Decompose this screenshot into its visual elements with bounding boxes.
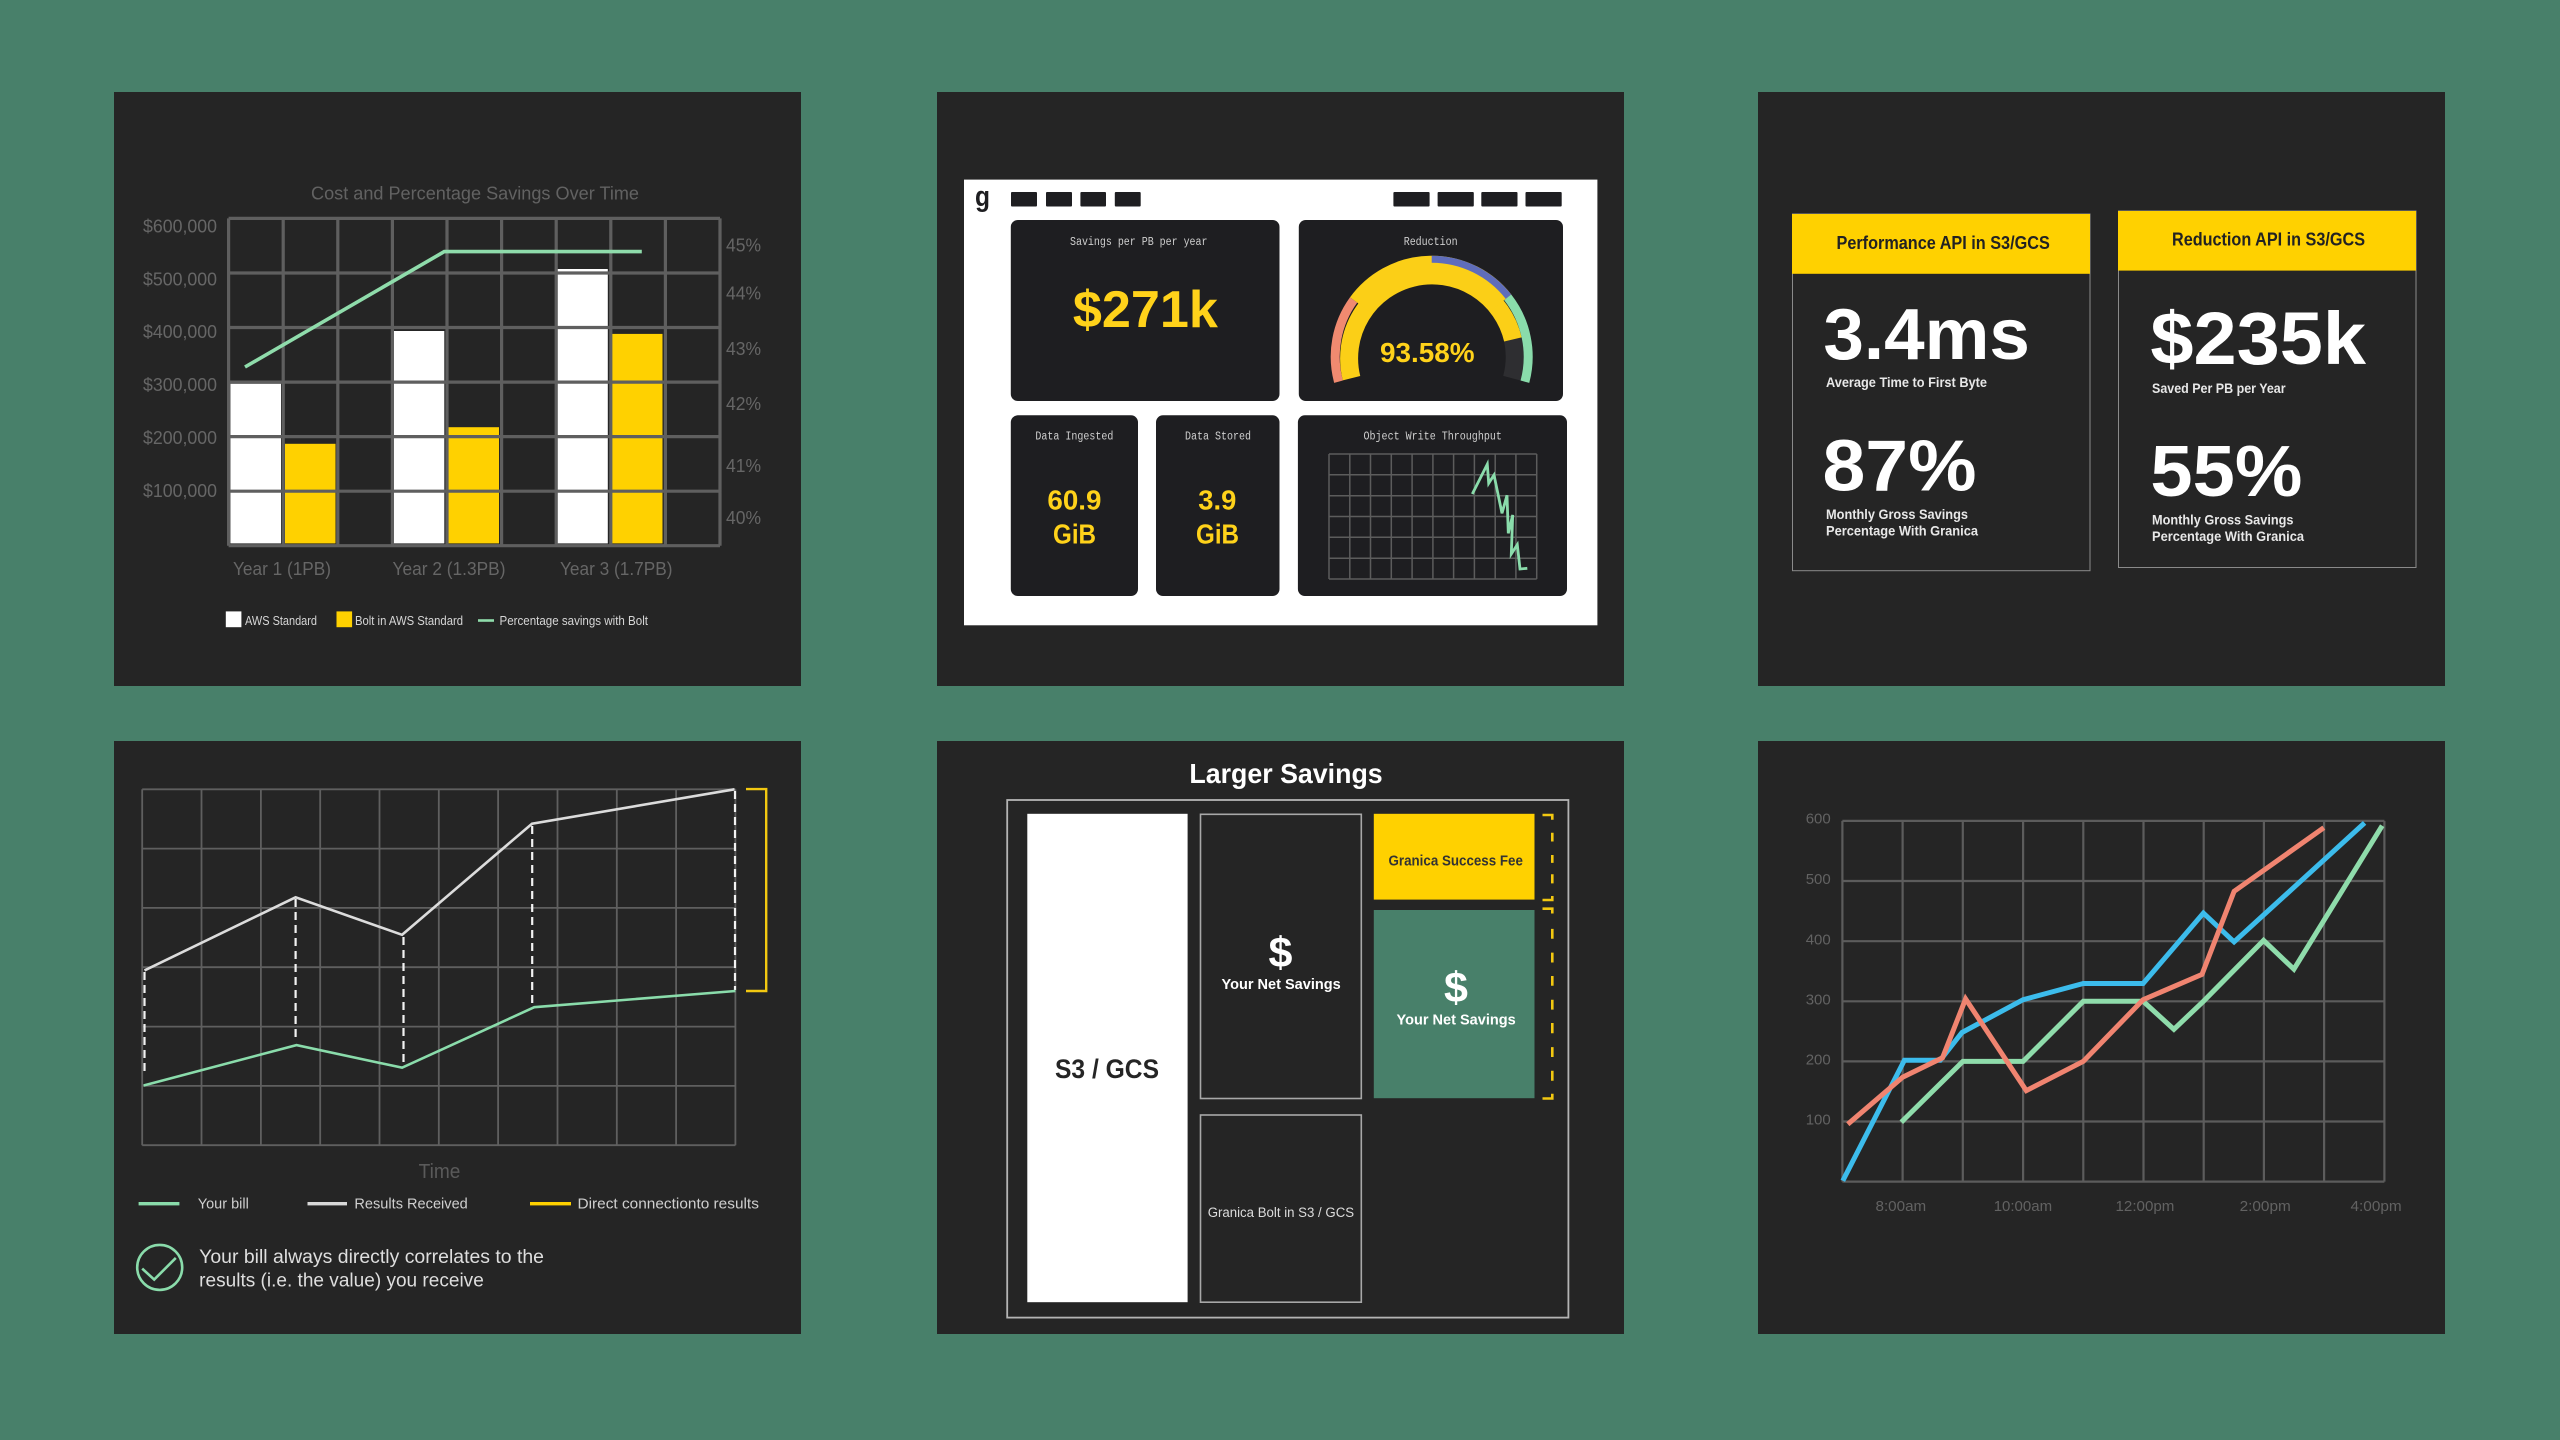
- card: reduction API: 55%: [2150, 432, 2302, 512]
- Granica Bolt box: Granica Bolt in S3 / GCS: [1208, 1205, 1354, 1220]
- left axis labels: $200,000: [143, 428, 217, 448]
- net savings box: [1200, 814, 1361, 1098]
- panel: larger savings: [937, 741, 1624, 1334]
- card: data ingested: [1011, 415, 1138, 596]
- left axis labels: $100,000: [143, 481, 217, 501]
- card: object write throughput: Object Write Throughput: [1364, 430, 1502, 444]
- card: data stored: GiB: [1196, 518, 1239, 549]
- logo g: g: [975, 181, 990, 213]
- chart title: Cost and Percentage Savings Over Time: [311, 184, 639, 204]
- card: performance API: Average Time to First Byte: [1826, 374, 1987, 390]
- Granica success fee box: Granica Success Fee: [1388, 854, 1523, 870]
- left axis labels: $300,000: [143, 375, 217, 395]
- left axis labels: $500,000: [143, 270, 217, 290]
- card: reduction API: $235k: [2150, 297, 2367, 380]
- legend: AWS Standard: [245, 613, 317, 628]
- nav placeholders: [1011, 192, 1562, 206]
- card: data ingested: 60.9: [1047, 484, 1101, 515]
- card: reduction API: Monthly Gross Savings: [2152, 512, 2294, 528]
- panel: multi-line chart: [1758, 741, 2445, 1334]
- x axis labels: 10:00am: [1994, 1198, 2052, 1215]
- icon: check circle: [137, 1245, 182, 1290]
- panel: dashboard mockup: [937, 92, 1624, 686]
- net savings box: $: [1268, 929, 1292, 977]
- card: data ingested: GiB: [1053, 518, 1096, 549]
- legend: Direct connectionto results: [578, 1196, 759, 1212]
- card: reduction gauge: [1299, 220, 1563, 401]
- card: savings per PB: Savings per PB per year: [1070, 236, 1208, 249]
- legend: Percentage savings with Bolt: [500, 613, 648, 628]
- right axis labels: 44%: [726, 284, 761, 304]
- callout text: Your bill always directly correlates to the: [199, 1247, 544, 1268]
- legend: Results Received: [354, 1196, 468, 1212]
- x axis labels: 12:00pm: [2116, 1198, 2174, 1215]
- right axis labels: [726, 236, 761, 528]
- axis label: time: Time: [419, 1161, 460, 1183]
- card: reduction API: Saved Per PB per Year: [2152, 380, 2286, 396]
- right axis labels: 43%: [726, 339, 761, 359]
- card: reduction API: Reduction API in S3/GCS: [2172, 230, 2365, 250]
- panel: API statistics: [1758, 92, 2445, 686]
- y axis labels: 500: [1806, 871, 1831, 888]
- net savings box: Your Net Savings: [1222, 976, 1341, 993]
- green net savings box: [1374, 910, 1534, 1098]
- y axis labels: 400: [1806, 932, 1831, 948]
- green net savings box: $: [1444, 964, 1468, 1012]
- Granica Bolt box: [1200, 1115, 1361, 1302]
- y axis labels: 300: [1806, 992, 1831, 1008]
- panel: bill vs results chart: [114, 741, 801, 1334]
- yellow dashed brackets: [1542, 815, 1552, 1098]
- card: data stored: [1156, 415, 1280, 596]
- card: data stored: Data Stored: [1185, 430, 1251, 444]
- green line: [1901, 826, 2382, 1122]
- S3 / GCS column: [1027, 814, 1188, 1302]
- card: performance API: Monthly Gross Savings: [1826, 506, 1968, 522]
- x axis labels: [233, 559, 672, 579]
- gauge arcs: [1335, 259, 1528, 382]
- y axis labels: 200: [1806, 1052, 1831, 1069]
- x axis labels: 8:00am: [1876, 1198, 1926, 1215]
- left axis labels: $400,000: [143, 322, 217, 342]
- x axis labels: Year 2 (1.3PB): [392, 559, 506, 579]
- legend: Your bill: [198, 1196, 249, 1212]
- card: performance API: [1792, 214, 2090, 571]
- bar chart bars: [230, 269, 662, 543]
- right axis labels: 40%: [726, 508, 761, 528]
- left axis labels: [143, 216, 217, 501]
- dashboard white window: [964, 180, 1597, 625]
- blue line: [1843, 823, 2365, 1181]
- panel: cost and percentage savings chart: [114, 92, 801, 686]
- green net savings box: Your Net Savings: [1396, 1012, 1516, 1028]
- Granica success fee box: [1374, 814, 1534, 900]
- x axis labels: 2:00pm: [2240, 1198, 2291, 1215]
- card: performance API: 3.4ms: [1823, 295, 2030, 375]
- left axis labels: $600,000: [143, 216, 217, 236]
- results received line: [144, 789, 734, 970]
- card: reduction gauge: Reduction: [1404, 236, 1458, 249]
- right axis labels: 42%: [726, 394, 761, 414]
- card: performance API: Performance API in S3/GCS: [1836, 233, 2050, 253]
- card: reduction API: [2118, 211, 2416, 568]
- y axis labels: 600: [1806, 810, 1831, 828]
- card: object write throughput: [1298, 415, 1567, 596]
- card: performance API: 87%: [1822, 426, 1976, 506]
- card: performance API: Percentage With Granica: [1826, 522, 1978, 538]
- x axis labels: Year 3 (1.7PB): [560, 559, 672, 579]
- x axis labels: 4:00pm: [2350, 1198, 2402, 1215]
- legend: Bolt in AWS Standard: [355, 613, 463, 628]
- card: data ingested: Data Ingested: [1035, 430, 1113, 444]
- x axis labels: [1876, 1198, 2402, 1215]
- x axis labels: Year 1 (1PB): [233, 559, 331, 579]
- right axis labels: 41%: [726, 456, 761, 476]
- card: savings per PB: $271k: [1073, 281, 1218, 339]
- throughput line: [1472, 464, 1527, 569]
- heading: Larger Savings: [1189, 758, 1383, 789]
- salmon line: [1848, 828, 2324, 1124]
- legend: [139, 1196, 759, 1212]
- callout text: results (i.e. the value) you receive: [199, 1270, 484, 1292]
- card: reduction API: Percentage With Granica: [2152, 528, 2304, 544]
- y axis labels: 100: [1806, 1112, 1831, 1129]
- percentage savings line: [245, 252, 642, 367]
- card: savings per PB: [1011, 220, 1280, 401]
- S3 / GCS column: S3 / GCS: [1055, 1054, 1159, 1084]
- legend: [226, 611, 648, 628]
- card: data stored: 3.9: [1198, 484, 1236, 515]
- dashed connectors: [144, 791, 735, 1076]
- card: reduction gauge: 93.58%: [1380, 337, 1475, 368]
- outer frame: [1007, 800, 1568, 1318]
- right axis labels: 45%: [726, 236, 761, 256]
- y axis labels: [1806, 810, 1831, 1129]
- your bill line: [144, 991, 735, 1086]
- callout text: [199, 1247, 544, 1292]
- direct connection bracket: [746, 789, 766, 991]
